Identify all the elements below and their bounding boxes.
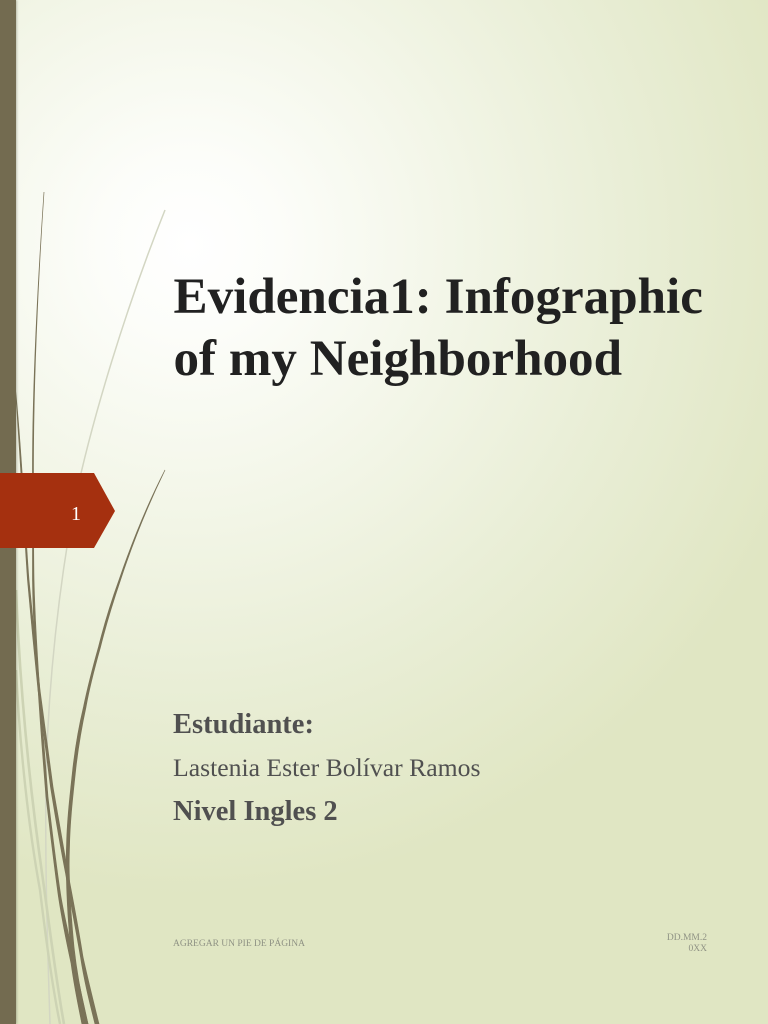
student name: Lastenia Ester Bolívar Ramos xyxy=(173,753,480,782)
page number: 1 xyxy=(71,503,81,525)
footer text: AGREGAR UN PIE DE PÁGINA xyxy=(173,939,305,949)
title: of my Neighborhood xyxy=(174,330,622,387)
footer date: DD.MM.2 xyxy=(667,933,707,943)
page number tag xyxy=(0,473,115,548)
footer date xyxy=(667,933,707,954)
title: Evidencia1: Infographic xyxy=(174,268,703,325)
title xyxy=(174,268,703,387)
left sidebar bar xyxy=(0,0,16,1024)
footer date: 0XX xyxy=(689,944,707,954)
student label: Estudiante: xyxy=(173,709,314,740)
level: Nivel Ingles 2 xyxy=(173,796,338,827)
